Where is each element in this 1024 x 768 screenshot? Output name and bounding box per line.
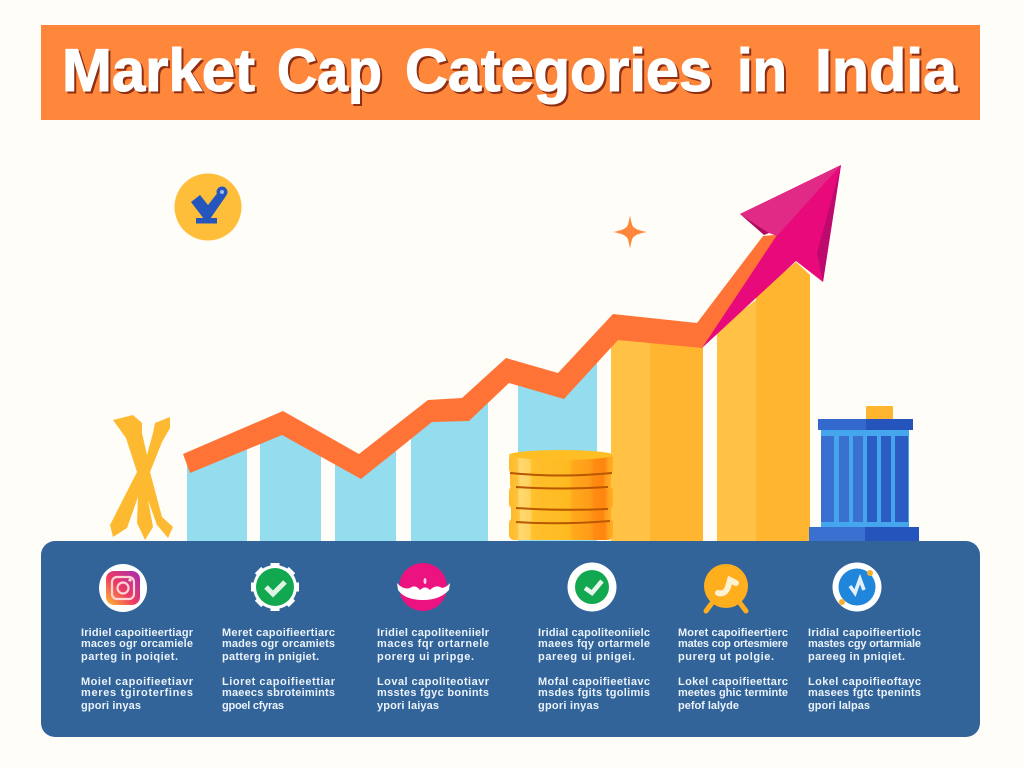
bar 5 (518, 350, 597, 541)
arrow head (702, 165, 841, 348)
bar 6 (611, 335, 703, 541)
title banner: Cap (277, 37, 382, 104)
category 5 (678, 564, 788, 712)
text block: msdes fgits tgolimis (538, 687, 650, 699)
text block: porerg ui pripge. (377, 651, 474, 663)
title banner: Market (62, 37, 255, 104)
text block: Mofal capoifieetiavc (538, 676, 650, 688)
text block (81, 627, 194, 712)
text block: meetes ghic terminte (678, 687, 788, 699)
text block: masees fgtc tpenints (808, 687, 921, 699)
text block: Iridial capoliteoniielc (538, 627, 650, 639)
text block: mastes cgy ortarmiale (808, 638, 921, 650)
text block: mates cop ortesmiere (678, 638, 788, 650)
category 2 (222, 563, 336, 712)
text block: ypori laiyas (377, 700, 439, 712)
panel: market cap categories (41, 541, 980, 737)
bar 4 (411, 400, 488, 541)
text block: maces ogr orcamiele (81, 638, 193, 650)
icon: sparkle star (613, 215, 647, 249)
text block: maees fqy ortarmele (538, 638, 650, 650)
icon: bank building (809, 406, 919, 541)
text block: maeecs sbroteimints (222, 687, 335, 699)
text block: patterg in pnigiet. (222, 651, 319, 663)
title banner (41, 25, 980, 120)
text block: Iridiel capoitieertiagr (81, 627, 194, 639)
icon: blue circle with note (832, 562, 882, 612)
text block: pareeg ui pnigei. (538, 651, 635, 663)
bar 7 (717, 262, 810, 541)
text block: Iridial capoifieertiolc (808, 627, 921, 639)
bar 1 (187, 440, 247, 541)
icon: stack of coins (509, 450, 613, 540)
bar chart: market cap bars (187, 262, 810, 541)
title banner: in (737, 37, 787, 104)
text block (808, 627, 921, 712)
title banner: Categories (405, 37, 712, 104)
text block: gpori inyas (81, 700, 141, 712)
text block: Lokel capoifieettarc (678, 676, 788, 688)
category 3 (377, 563, 490, 712)
text block: Meret capoifieertiarc (222, 627, 335, 639)
text block (377, 627, 490, 712)
icon: orange medal with note (704, 564, 748, 611)
text block: maces fqr ortarnele (377, 638, 489, 650)
text block: gpori lalpas (808, 700, 870, 712)
icon: camera (99, 564, 147, 612)
text block: mades ogr orcamiets (222, 638, 335, 650)
text block: Moret capoifieertierc (678, 627, 788, 639)
text block: Moiel capoifieetiavr (81, 676, 194, 688)
text block (538, 627, 650, 712)
text block (678, 627, 788, 712)
category 1 (81, 564, 194, 712)
text block: Lioret capoifieettiar (222, 676, 336, 688)
text block: msstes fgyc bonints (377, 687, 489, 699)
text block: meres tgiroterfines (81, 687, 193, 699)
title banner: India (815, 37, 958, 104)
icon: crossed tools (110, 415, 173, 540)
icon: yellow badge with check (174, 174, 242, 240)
trend line arrow (183, 165, 841, 479)
text block: pareeg in pniqiet. (808, 651, 905, 663)
icon: pink donut bowl (397, 563, 450, 611)
text block: pefof lalyde (678, 700, 739, 712)
text block: purerg ut polgie. (678, 651, 774, 663)
text block: Loval capoliteotiavr (377, 676, 490, 688)
bar 2 (260, 420, 321, 541)
text block (222, 627, 336, 712)
icon: green gear check (251, 563, 299, 611)
text block: Iridiel capoliteeniielr (377, 627, 490, 639)
category 4 (538, 562, 650, 712)
icon: green check circle (568, 562, 616, 612)
text block: gpori inyas (538, 700, 599, 712)
text block: Lokel capoifieoftayc (808, 676, 921, 688)
text block: parteg in poiqiet. (81, 651, 178, 663)
category 6 (808, 562, 921, 712)
text block: gpoel cfyras (222, 700, 284, 712)
bar 3 (335, 445, 396, 541)
